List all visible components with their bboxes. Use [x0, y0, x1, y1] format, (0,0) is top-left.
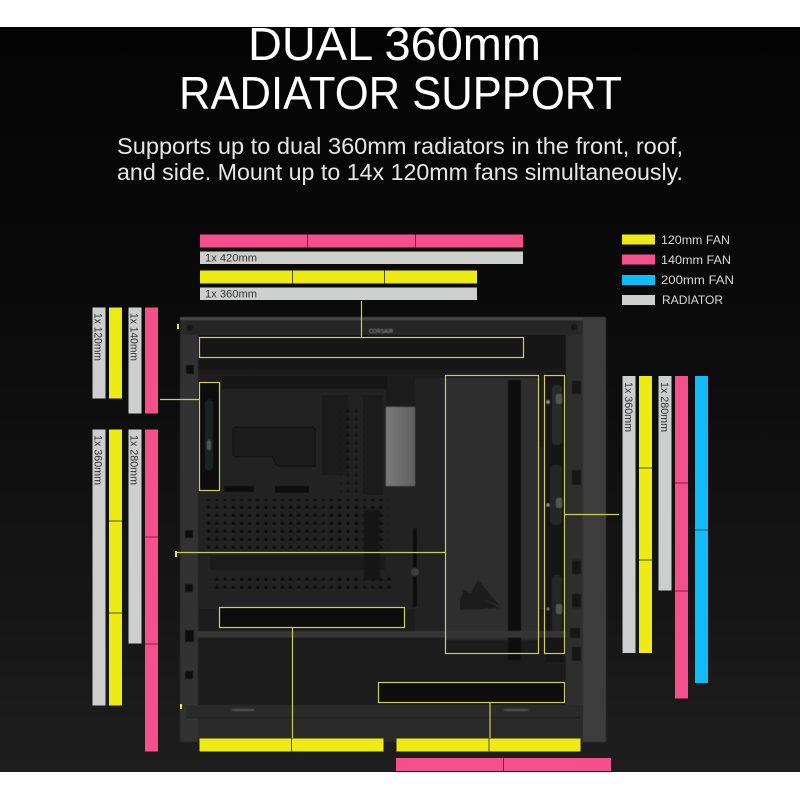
motherboard tray: [202, 376, 392, 628]
title: [179, 18, 622, 119]
top panel: [180, 317, 606, 335]
bottom mount bars: [200, 738, 611, 771]
description text: [117, 133, 683, 185]
small yellow markers: [175, 324, 182, 709]
420mm fan bar: [200, 234, 523, 248]
1x 420mm radiator bar: [200, 252, 523, 264]
left upper vertical bars: 1x 140mm: [128, 313, 140, 361]
case outer shell: [180, 317, 606, 742]
left upper vertical bars: 1x 120mm: [92, 313, 104, 361]
yellow outlines and leader lines: [160, 301, 619, 738]
corsair sail logo: [460, 580, 500, 610]
PSU shroud bar: [198, 631, 566, 638]
case interior: [198, 335, 566, 705]
description text: and side. Mount up to 14x 120mm fans simultaneously.: [117, 159, 683, 185]
title: RADIATOR SUPPORT: [179, 67, 622, 119]
top mount bars: [200, 234, 523, 300]
1x 360mm radiator bar: 1x 360mm: [205, 288, 257, 300]
left lower vertical bars: [92, 430, 158, 752]
right vertical bars: 1x 280mm: [658, 382, 670, 432]
legend: 200mm FAN: [661, 275, 734, 287]
legend: RADIATOR: [662, 295, 723, 307]
360mm fan bar: [200, 270, 477, 284]
legend: 120mm FAN: [661, 235, 730, 247]
side fans: [546, 372, 564, 662]
right vertical bars: 1x 360mm: [622, 382, 634, 432]
bottom radiator shadow: [379, 683, 564, 702]
legend: 140mm FAN: [661, 255, 731, 267]
lower radiator shadow: [220, 608, 404, 627]
top panel: CORSAIR: [369, 329, 393, 335]
PC case illustration: [180, 317, 606, 742]
right vertical bars: [622, 376, 708, 698]
rear tray area: [415, 378, 445, 631]
left upper vertical bars: [92, 308, 158, 414]
top radiator shadow: [200, 338, 523, 357]
legend: [622, 234, 734, 307]
grey radiator block: [386, 407, 415, 486]
left column: [180, 335, 198, 742]
left lower vertical bars: 1x 280mm: [128, 435, 140, 485]
left fan: [200, 383, 219, 490]
title: DUAL 360mm: [248, 18, 541, 70]
description text: Supports up to dual 360mm radiators in the front, roof,: [117, 133, 683, 159]
side panel area: [445, 378, 538, 660]
1x 420mm radiator bar: 1x 420mm: [205, 252, 257, 264]
cable slider: [411, 528, 419, 607]
left lower vertical bars: 1x 360mm: [92, 435, 104, 485]
right column: [566, 317, 606, 742]
left column clips: [185, 365, 194, 679]
1x 360mm radiator bar: [200, 288, 477, 300]
bottom rail: [186, 705, 580, 718]
